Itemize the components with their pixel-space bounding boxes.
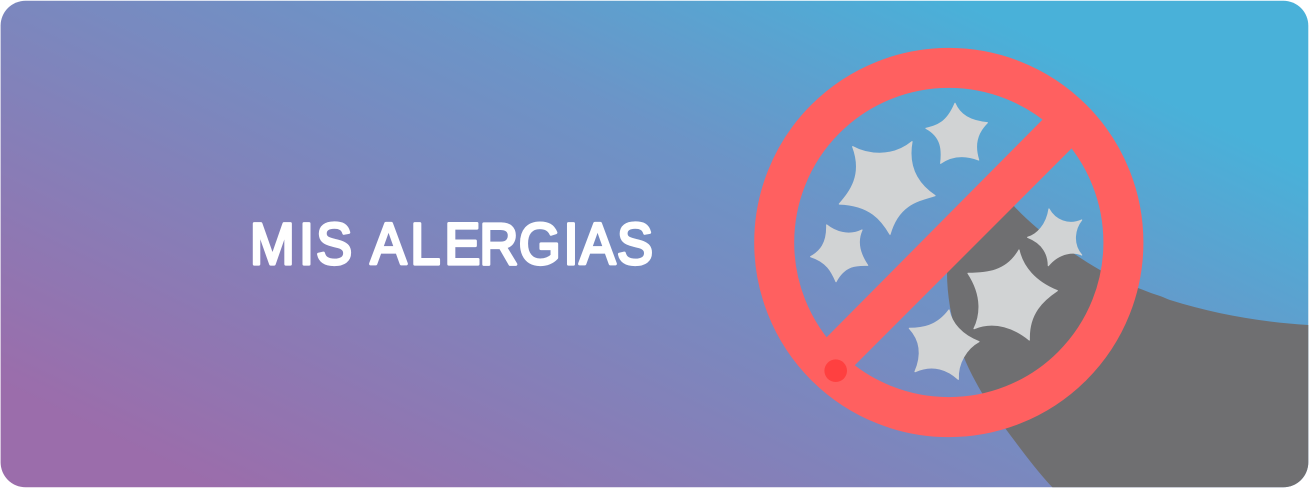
star: right <box>1028 209 1082 266</box>
star: bottom <box>909 310 979 379</box>
star: large upper left <box>839 142 935 234</box>
title: MIS ALERGIAS <box>250 211 653 276</box>
diagonal bar <box>810 102 1089 382</box>
ring <box>774 68 1123 417</box>
star: left <box>811 225 868 282</box>
prohibition sign <box>774 68 1123 417</box>
stars <box>811 103 1082 379</box>
star: large lower right <box>968 250 1057 340</box>
red dot <box>824 359 847 382</box>
star: top <box>926 103 987 163</box>
grey shape <box>947 205 1309 488</box>
